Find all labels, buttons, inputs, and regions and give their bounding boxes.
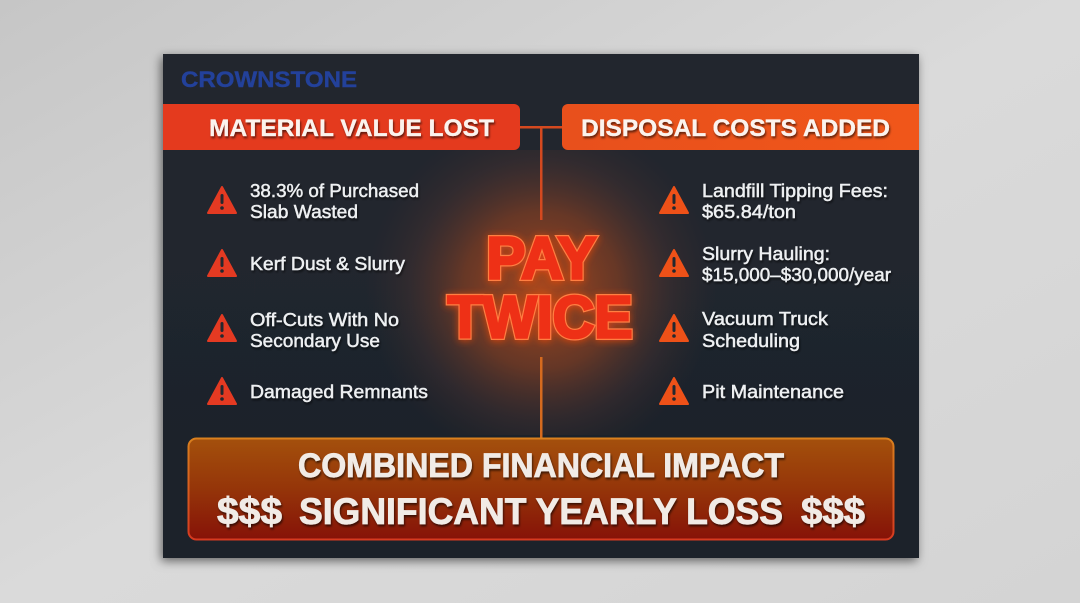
item: off-cuts: Off-Cuts With No xyxy=(250,309,399,330)
item: slurry hauling: Slurry Hauling: xyxy=(702,243,830,264)
center title: pay twice: TWICE xyxy=(448,284,632,350)
center glow xyxy=(366,150,716,435)
heading: disposal costs added xyxy=(562,104,919,150)
center title: pay twice: PAY xyxy=(486,226,596,292)
item: vacuum truck: Vacuum Truck xyxy=(702,308,829,329)
heading: material value lost xyxy=(163,104,520,150)
heading: material value lost: MATERIAL VALUE LOST xyxy=(209,115,494,142)
item: vacuum truck: Scheduling xyxy=(702,330,800,351)
item: slab wasted: Slab Wasted xyxy=(250,201,358,222)
item: damaged remnants: Damaged Remnants xyxy=(250,381,428,402)
item: damaged remnants xyxy=(208,378,428,404)
item: tipping fees: Landfill Tipping Fees: xyxy=(702,180,888,201)
item: pit maintenance: Pit Maintenance xyxy=(702,381,844,402)
item: kerf dust xyxy=(208,250,406,276)
left list xyxy=(208,180,428,404)
item: slurry hauling xyxy=(660,243,891,285)
center title: pay twice: PAY xyxy=(486,226,596,292)
item: tipping fees xyxy=(660,180,888,222)
banner: combined financial impact: $$$ xyxy=(217,491,282,533)
panel: dark card xyxy=(163,54,919,558)
item: slurry hauling: $15,000–$30,000/year xyxy=(702,264,891,285)
banner: combined financial impact: SIGNIFICANT YEARLY LOSS xyxy=(299,491,783,532)
logo: Crownstone: CROWNSTONE xyxy=(181,67,357,92)
center title: pay twice: TWICE xyxy=(448,284,632,350)
banner: combined financial impact: COMBINED FINANCIAL IMPACT xyxy=(298,447,784,485)
item: off-cuts xyxy=(208,309,399,351)
item: kerf dust: Kerf Dust & Slurry xyxy=(250,253,406,274)
right list xyxy=(660,180,891,404)
item: off-cuts: Secondary Use xyxy=(250,330,380,351)
item: slab wasted xyxy=(208,180,419,222)
banner: combined financial impact: $$$ xyxy=(801,491,865,533)
item: tipping fees: $65.84/ton xyxy=(702,201,796,222)
item: slab wasted: 38.3% of Purchased xyxy=(250,180,419,201)
item: pit maintenance xyxy=(660,378,844,404)
item: vacuum truck xyxy=(660,308,829,351)
connector lines xyxy=(520,126,562,438)
center title: pay twice xyxy=(448,226,632,350)
heading: disposal costs added: DISPOSAL COSTS ADDED xyxy=(581,115,890,142)
banner: combined financial impact xyxy=(188,438,894,540)
